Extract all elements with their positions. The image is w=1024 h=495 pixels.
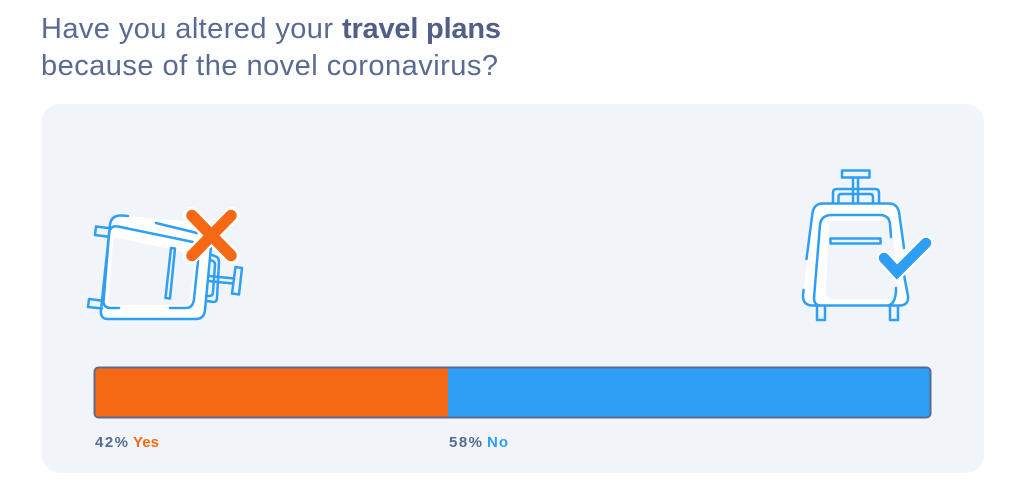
title: Have you altered your (41, 13, 333, 45)
label: 42% yes: 42% (95, 434, 128, 451)
title: travel plans (342, 13, 501, 45)
label: 58% no: No (487, 434, 508, 451)
icon: tipped suitcase with cross (88, 215, 242, 319)
title (41, 13, 501, 82)
label: 42% yes (95, 434, 159, 451)
label: 58% no (449, 434, 508, 451)
title: because of the novel coronavirus? (41, 50, 498, 82)
label: 58% no: 58% (449, 434, 482, 451)
label: 42% yes: Yes (133, 434, 159, 451)
panel: survey result (42, 104, 984, 473)
bar chart: 42% yes, 58% no (94, 368, 930, 418)
icon: upright suitcase with check (803, 170, 926, 320)
